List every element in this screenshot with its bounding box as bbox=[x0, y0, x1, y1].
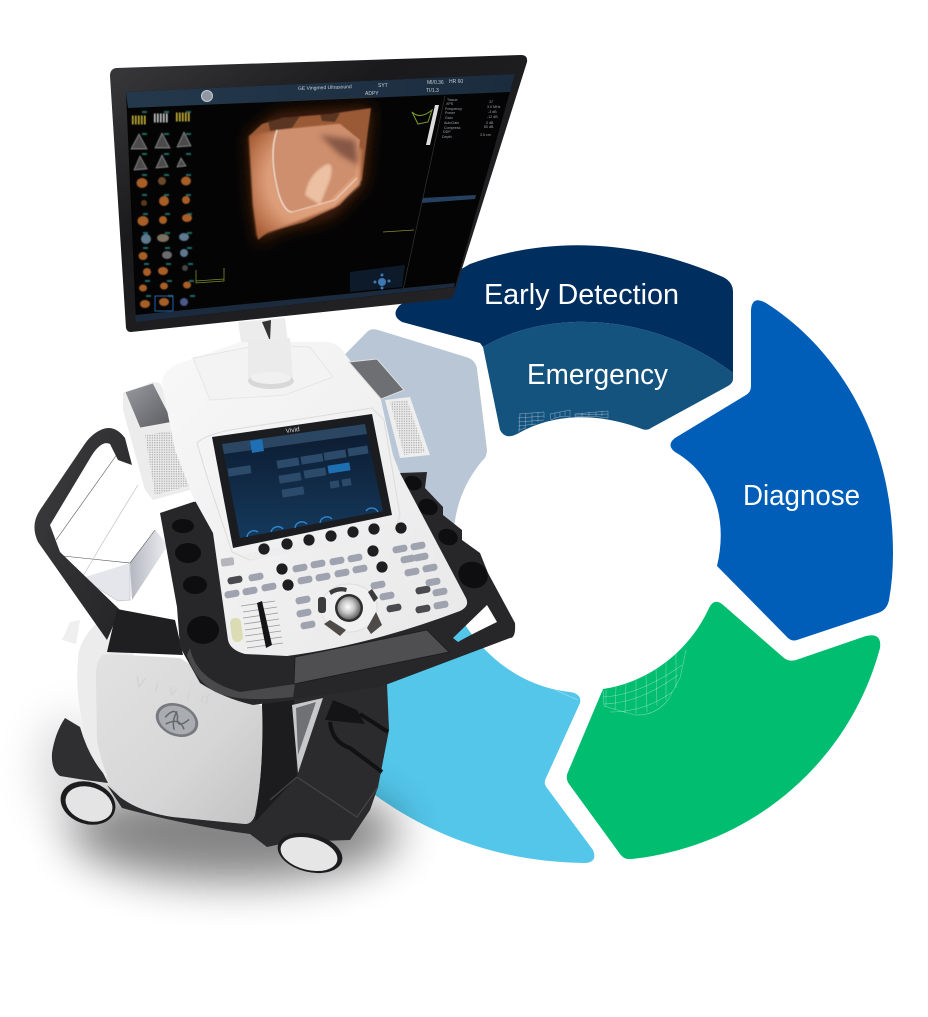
touch screen dials bbox=[247, 508, 378, 537]
label: Emergency: Emergency bbox=[527, 359, 668, 391]
tray cups bbox=[172, 473, 492, 644]
waveform thumbnails bbox=[132, 117, 190, 120]
colour echo thumbnails bbox=[136, 176, 192, 308]
screen top bar: ADPY bbox=[365, 91, 379, 97]
screen top bar: MI/0.36 bbox=[427, 80, 444, 86]
silver side strip bbox=[292, 698, 323, 773]
segment: Emergency bbox=[483, 322, 733, 436]
bottom status bar bbox=[135, 283, 455, 322]
grey scale bar bbox=[426, 105, 439, 145]
base top ridge bbox=[270, 777, 378, 817]
wheel left bbox=[55, 774, 121, 832]
left speaker bbox=[123, 382, 193, 500]
donut cycle diagram bbox=[300, 245, 893, 863]
right speaker bbox=[349, 359, 430, 458]
rotary knobs bbox=[258, 522, 407, 591]
white nub bbox=[62, 620, 80, 644]
trackball bbox=[318, 584, 382, 636]
segment: light blue (unlabelled) bbox=[330, 620, 594, 863]
console top recess bbox=[193, 345, 333, 400]
cart back body bbox=[77, 610, 135, 780]
thumbnail column bbox=[131, 112, 196, 308]
screen top bar: TI/1.3 bbox=[426, 88, 439, 94]
blue control cluster bbox=[350, 265, 405, 292]
cart handle bbox=[34, 428, 132, 640]
device floor shadow bbox=[38, 715, 400, 882]
screen top bar: GE Vingmed Ultrasound bbox=[298, 84, 352, 92]
label: Early Detection: Early Detection bbox=[484, 279, 679, 311]
brand label: Vivid bbox=[285, 426, 300, 435]
segment: Early Detection bbox=[395, 245, 733, 373]
cart rear column bbox=[255, 700, 297, 822]
right panel divider and scale bar bbox=[403, 96, 445, 290]
right parameter list bbox=[442, 98, 501, 139]
right parameter list: Frequency bbox=[445, 107, 462, 111]
wireframe: emergency texture bbox=[518, 410, 608, 432]
right parameter list: Depth bbox=[442, 135, 452, 139]
screen top bar: HR 60 bbox=[449, 79, 463, 85]
right parameter list: Power bbox=[445, 111, 456, 115]
right parameter list: 60 dB bbox=[484, 125, 494, 129]
touch screen tabs bbox=[222, 424, 367, 454]
monitor arm base bbox=[248, 338, 294, 389]
screen top bar bbox=[126, 74, 515, 108]
power button bbox=[221, 557, 234, 567]
screen top bar: SYT bbox=[378, 83, 388, 89]
monitor bbox=[110, 55, 527, 332]
right parameter list: Gain bbox=[445, 116, 453, 120]
right parameter list: Tissue bbox=[447, 98, 457, 102]
TGC slider bbox=[229, 601, 283, 648]
tray lower highlight bbox=[187, 648, 295, 699]
console tray and front handle bbox=[160, 472, 515, 705]
segment: Diagnose bbox=[670, 300, 893, 640]
right parameter list: XPS bbox=[446, 102, 454, 106]
thumbnail teal tags bbox=[142, 112, 196, 296]
heart 3D render bbox=[248, 107, 372, 247]
right parameter list: 3.0 MHz bbox=[487, 105, 501, 109]
right parameter list: 3.5 cm bbox=[480, 133, 491, 137]
right parameter list: AutoGain bbox=[444, 121, 459, 125]
monitor screen bbox=[126, 74, 515, 322]
knob recess strip bbox=[245, 524, 395, 560]
cart handle glass tray bbox=[56, 453, 168, 601]
monitor arm bbox=[238, 318, 293, 386]
front pad bbox=[294, 630, 449, 684]
cart side panel with logo bbox=[96, 654, 262, 824]
ECG trace bbox=[196, 268, 224, 283]
right parameter list: -12 dB bbox=[487, 115, 498, 119]
cart base bbox=[107, 684, 389, 847]
wheel right bbox=[273, 827, 347, 879]
selected thumbnail frame bbox=[155, 296, 173, 311]
grey echo thumbnails bbox=[131, 132, 191, 170]
logo badge bbox=[151, 697, 203, 743]
cart base left foot bbox=[52, 718, 108, 783]
touch screen surround bbox=[197, 408, 400, 560]
faint brand lettering: Vivid bbox=[133, 673, 222, 711]
right parameter list: -3 dB bbox=[488, 110, 497, 114]
right parameter list: DDP bbox=[443, 130, 451, 134]
segment: slate (unlabelled) bbox=[300, 329, 487, 620]
console body bbox=[162, 342, 467, 656]
label: Diagnose: Diagnose bbox=[743, 480, 860, 512]
cable strap bbox=[330, 714, 388, 772]
wireframe: green segment texture bbox=[555, 650, 686, 715]
dark band above panel bbox=[107, 609, 183, 655]
depth marker bbox=[383, 230, 414, 232]
right parameter list: 0 dB bbox=[486, 121, 494, 125]
ultrasound machine bbox=[34, 55, 527, 879]
segment: green (unlabelled) bbox=[567, 602, 880, 859]
right parameter list: 37 bbox=[489, 100, 493, 104]
small sector icon bbox=[412, 110, 432, 124]
keyboard keys bbox=[224, 541, 449, 630]
cable holder bbox=[325, 700, 365, 724]
touch screen keys bbox=[228, 445, 369, 498]
right parameter list: Compress bbox=[444, 126, 461, 130]
touch screen bbox=[212, 414, 392, 548]
